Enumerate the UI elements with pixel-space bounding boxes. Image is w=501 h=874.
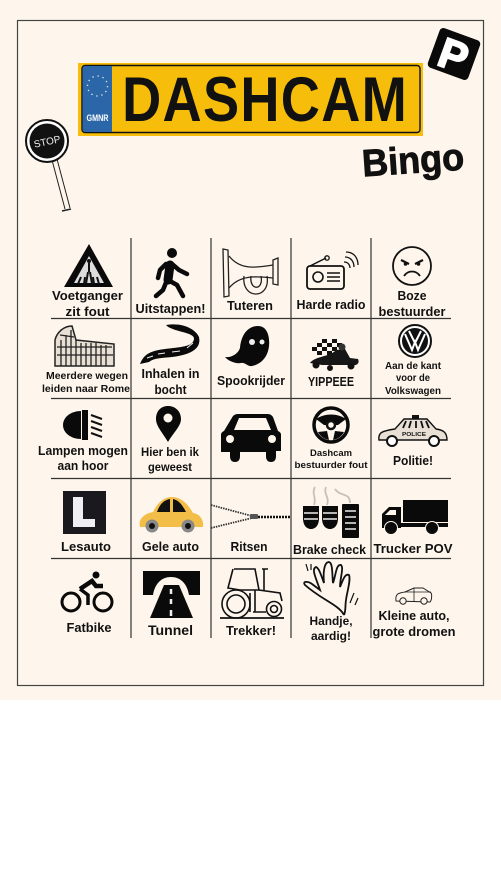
cell: Boze bestuurder: bestuurder — [378, 304, 446, 319]
cell: Uitstappen! — [136, 248, 206, 316]
Bingo heading: Bingo — [361, 136, 465, 186]
cell: Harde radio — [296, 252, 366, 312]
parking sign icon — [425, 26, 482, 85]
bingo grid lines — [51, 238, 451, 638]
cell: Meerdere wegen leiden naar Rome: Meerdere wegen — [46, 370, 128, 382]
cell: Meerdere wegen leiden naar Rome: leiden naar Rome — [42, 383, 130, 395]
cell: YIPPEEE: YIPPEEE — [308, 375, 354, 389]
cell: Tunnel: Tunnel — [148, 623, 193, 638]
cell: Tunnel — [143, 571, 200, 638]
cell: Spookrijder: Spookrijder — [217, 373, 285, 388]
cell: Trekker!: Trekker! — [226, 624, 276, 638]
cell: Ritsen — [211, 505, 290, 554]
cell: Tuteren — [223, 249, 278, 313]
cell: Dashcam bestuurder fout: bestuurder fout — [294, 460, 368, 471]
cell: Lampen mogen aan hoor: Lampen mogen — [38, 444, 128, 458]
cell: Inhalen in bocht: Inhalen in — [142, 366, 200, 381]
cell: Trucker POV — [374, 500, 453, 556]
cell: Inhalen in bocht — [140, 324, 200, 397]
cell: Handje, aardig!: Handje, — [310, 614, 352, 628]
cell: Ritsen: Ritsen — [230, 540, 268, 554]
cell: Fatbike — [62, 572, 112, 635]
cell: Lampen mogen aan hoor — [38, 410, 128, 473]
cell: Aan de kant voor de Volkswagen — [385, 325, 442, 397]
cell: Boze bestuurder: Boze — [398, 288, 426, 303]
license plate title: GMNR — [86, 113, 109, 123]
cell: Meerdere wegen leiden naar Rome — [42, 326, 130, 395]
cell: Inhalen in bocht: bocht — [154, 382, 187, 397]
cell: Tuteren: Tuteren — [227, 298, 273, 313]
parking sign icon: P — [432, 29, 475, 82]
cell: Kleine auto, grote dromen — [372, 588, 456, 639]
cell: Hier ben ik geweest: Hier ben ik — [141, 447, 200, 459]
cell: Kleine auto, grote dromen: Kleine auto, — [378, 609, 450, 623]
cell: Gele auto — [140, 497, 203, 554]
cell: Hier ben ik geweest — [141, 406, 200, 474]
cell: Dashcam bestuurder fout — [294, 408, 368, 471]
cell: Handje, aardig!: aardig! — [311, 629, 351, 643]
cell: Aan de kant voor de Volkswagen: Volkswagen — [385, 386, 441, 397]
cell: Dashcam bestuurder fout: Dashcam — [310, 448, 352, 459]
cell: Fatbike: Fatbike — [66, 621, 112, 635]
cell: Aan de kant voor de Volkswagen: Aan de kant — [385, 361, 442, 372]
license plate title: DASHCAM — [122, 65, 407, 135]
cell: Uitstappen!: Uitstappen! — [136, 301, 206, 316]
cell: Trekker! — [220, 569, 284, 638]
cell: Lesauto: Lesauto — [61, 539, 111, 554]
cell: YIPPEEE — [308, 339, 359, 389]
cell: Politie! — [379, 415, 447, 468]
stop sign icon: STOP — [33, 134, 62, 151]
stop sign icon — [26, 120, 71, 211]
cell: Voetganger zit fout: Voetganger — [52, 288, 123, 303]
cell: Harde radio: Harde radio — [296, 297, 366, 312]
cell: Politie!: Politie! — [393, 454, 433, 468]
outer border — [18, 20, 484, 686]
cell: Brake check — [293, 487, 367, 557]
cell: Kleine auto, grote dromen: grote dromen — [372, 625, 456, 639]
cell: Gele auto: Gele auto — [142, 539, 199, 554]
cell: Spookrijder — [217, 326, 285, 388]
cell: Aan de kant voor de Volkswagen: voor de — [396, 373, 430, 384]
cell: Brake check: Brake check — [293, 542, 367, 557]
cell: Boze bestuurder — [378, 247, 446, 319]
cell: black car front — [221, 414, 281, 462]
cell: Voetganger zit fout — [52, 244, 123, 319]
cell: Politie!: POLICE — [402, 432, 427, 438]
cell: Trucker POV: Trucker POV — [374, 541, 453, 556]
cell: Handje, aardig! — [304, 562, 358, 643]
cell: Voetganger zit fout: zit fout — [66, 304, 110, 319]
cell: Hier ben ik geweest: geweest — [148, 462, 192, 474]
cell: Lampen mogen aan hoor: aan hoor — [58, 459, 109, 473]
cell: Lesauto — [61, 491, 111, 554]
